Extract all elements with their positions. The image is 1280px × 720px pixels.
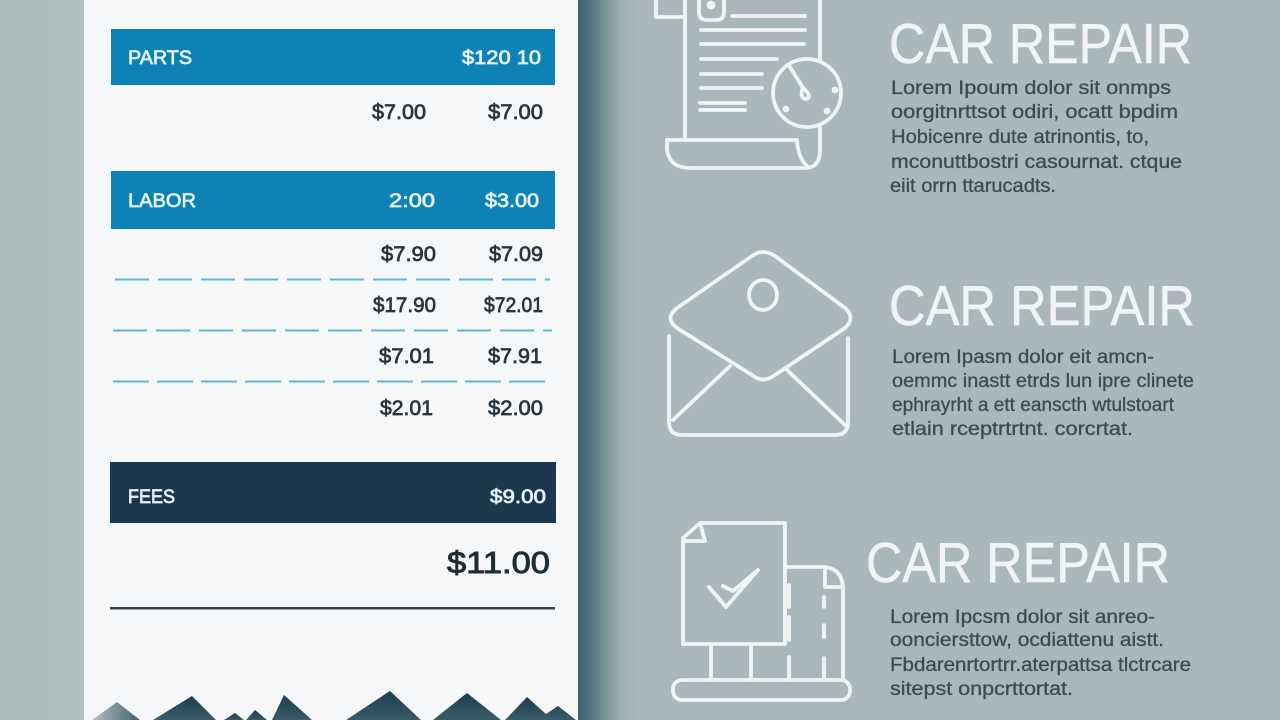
- panel: item 1: [656, 0, 1192, 197]
- section: fees: FEES: [128, 487, 175, 508]
- text block: Lorem Ipoum dolor sit onmps: [891, 78, 1171, 99]
- panel: invoice receipt: [84, 0, 578, 720]
- text block: eiit orrn ttarucadts.: [890, 176, 1056, 197]
- section: labor: $17.90: [373, 294, 436, 317]
- text block: oorgitnrttsot odiri, ocatt bpdim: [891, 102, 1178, 123]
- total amount: $11.00: [447, 545, 550, 580]
- receipt paper: [84, 0, 578, 720]
- text block: etlain rceptrtrtnt. corcrtat.: [892, 419, 1133, 440]
- text block: oonciersttow, ocdiattenu aistt.: [890, 630, 1164, 651]
- text block: Hobicenre dute atrinontis, to,: [891, 127, 1149, 148]
- section: labor: $7.90: [381, 243, 436, 266]
- section: labor: $7.91: [488, 345, 542, 368]
- text block: Lorem Ipasm dolor eit amcn-: [892, 347, 1154, 368]
- heading: CAR REPAIR: [889, 274, 1195, 338]
- section: parts: $7.00: [488, 101, 543, 124]
- section: parts: $7.00: [372, 101, 426, 124]
- text block: mconuttbostri casournat. ctque: [891, 152, 1182, 173]
- heading: CAR REPAIR: [866, 531, 1170, 595]
- panel: item 2: [669, 252, 1195, 440]
- text block: ephrayrht a ett eanscth wtulstoart: [892, 395, 1175, 416]
- section: labor: 2:00: [389, 191, 435, 212]
- text block: Fbdarenrtortrr.aterpattsa tlctrcare: [890, 655, 1191, 676]
- section: labor: $3.00: [485, 191, 539, 212]
- icon: document with gauge: [656, 0, 841, 168]
- heading: CAR REPAIR: [889, 12, 1192, 76]
- section: labor: $7.09: [489, 243, 543, 266]
- panel: item 3: [673, 523, 1191, 700]
- section: parts: $120 10: [462, 48, 541, 69]
- section: labor: $2.01: [380, 397, 433, 420]
- section: fees: $9.00: [490, 487, 546, 508]
- section: labor: $72.01: [484, 294, 543, 317]
- mountain edge: [92, 691, 576, 720]
- text block: [892, 347, 1194, 440]
- section: labor: [111, 171, 555, 420]
- text block: Lorem Ipcsm dolor sit anreo-: [890, 607, 1155, 628]
- section: labor: LABOR: [128, 191, 196, 212]
- text block: [890, 78, 1182, 197]
- icon: open envelope: [669, 252, 850, 435]
- section: parts: [111, 29, 555, 124]
- text block: sitepst onpcrttortat.: [890, 679, 1073, 700]
- text block: [890, 607, 1191, 700]
- section: fees: [110, 462, 556, 523]
- section: parts: PARTS: [128, 48, 192, 69]
- text block: oemmc inastt etrds lun ipre clinete: [892, 371, 1194, 392]
- total rule: [110, 607, 555, 610]
- icon: checked documents on stand: [673, 523, 850, 700]
- section: labor: $7.01: [379, 345, 434, 368]
- section: labor: $2.00: [488, 397, 543, 420]
